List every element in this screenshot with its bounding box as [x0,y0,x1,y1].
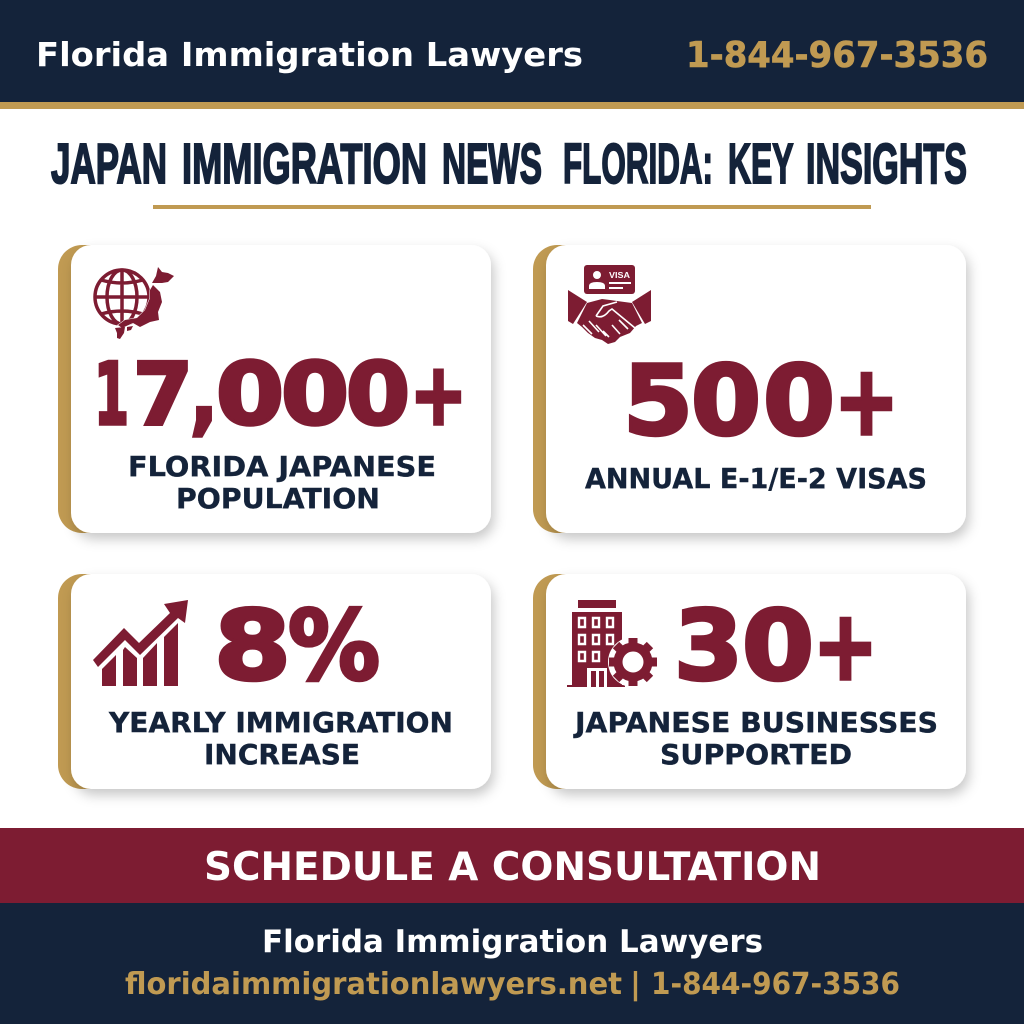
icon: visa card and handshake [568,265,651,344]
label: POPULATION [176,482,380,515]
call to action band [0,828,1024,903]
statistic: 500+: 5 [623,345,693,457]
title: KEY [728,132,794,196]
label [128,450,436,515]
statistic: 17,000+: 7 [133,345,193,445]
statistic: 17,000+: + [410,345,467,445]
footer contact: 1-844-967-3536 [651,967,900,1002]
statistic: 17,000+: 1 [94,345,129,445]
statistic: 17,000+: 0 [281,345,349,445]
icon: globe and Japan [95,267,174,339]
icon: rising bar chart [93,600,188,686]
title: FLORIDA: [563,132,713,196]
statistic: 30+: + [813,590,878,702]
footer contact: floridaimmigrationlawyers.net [125,967,622,1002]
title: NEWS [442,132,542,196]
label: JAPANESE BUSINESSES [573,706,938,739]
label: YEARLY IMMIGRATION [108,706,453,739]
statistic: 30+: 0 [742,590,814,702]
panel: Japanese businesses supported [533,574,966,789]
statistic: 17,000+: 0 [346,345,410,445]
icon: visa card and handshake: VISA [609,270,630,280]
call to action band: SCHEDULE A CONSULTATION [204,845,821,890]
statistic: 8%: % [288,590,380,702]
label [573,706,938,771]
firm name: Florida Immigration Lawyers [36,35,583,74]
label: ANNUAL E-1/E-2 VISAS [585,462,927,495]
panel: annual E-1/E-2 visas [533,245,966,533]
footer firm name: Florida Immigration Lawyers [262,924,763,960]
statistic: 8%: 8 [214,590,291,702]
icon: building and gear [567,600,658,687]
title: JAPAN [51,132,167,196]
panel: yearly immigration increase [58,574,491,789]
label: FLORIDA JAPANESE [128,450,436,483]
statistic: 500+: + [834,345,899,457]
footer band [0,903,1024,1024]
statistic: 17,000+: 0 [216,345,284,445]
title: IMMIGRATION [182,132,427,196]
header band [0,0,1024,109]
label: INCREASE [204,738,360,771]
statistic: 500+: 0 [763,345,835,457]
statistic: 500+: 0 [691,345,761,457]
phone number: 1-844-967-3536 [686,35,988,76]
label: SUPPORTED [660,738,852,771]
label [108,706,453,771]
panel: Florida Japanese population [58,245,491,533]
statistic: 30+: 3 [674,590,743,702]
footer contact: | [630,967,641,1002]
statistic: 17,000+: , [190,345,218,445]
